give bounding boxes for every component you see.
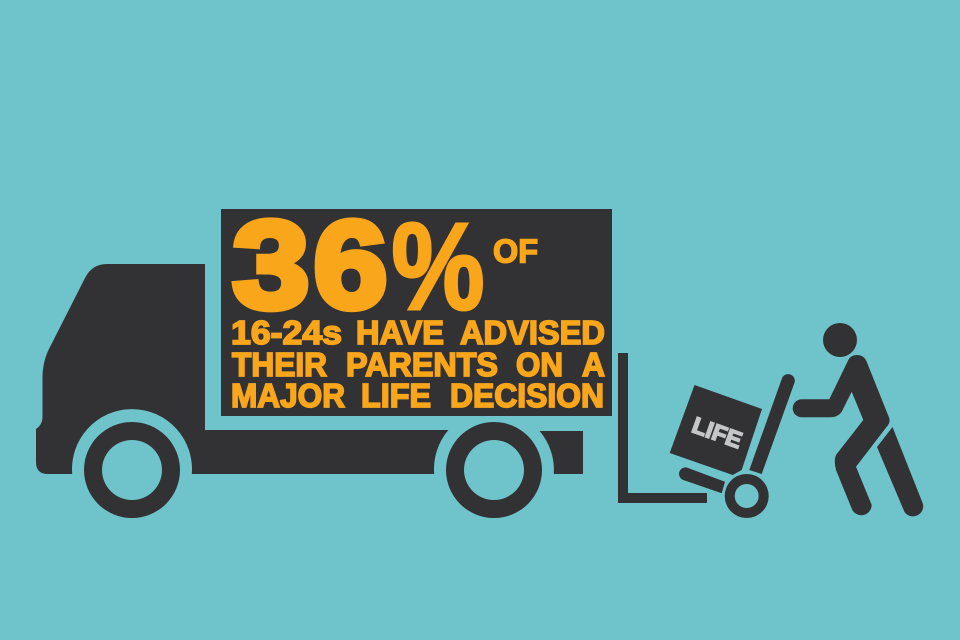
trolley foot plate [679, 467, 725, 493]
head [823, 323, 857, 357]
cargo panel [221, 209, 612, 416]
forklift fork [618, 353, 707, 503]
big digit 6: 6 [314, 196, 388, 334]
trolley wheel [725, 474, 769, 518]
box label LIFE: LIFE [689, 412, 746, 453]
statement line 3 [231, 377, 604, 414]
truck cab and chassis [36, 264, 448, 474]
word OF: OF [493, 232, 538, 270]
HAVE: HAVE [356, 314, 444, 351]
front wheel [84, 422, 180, 518]
truck [36, 264, 583, 518]
person pushing trolley [793, 323, 923, 516]
statement line 2 [232, 346, 605, 383]
A: A [582, 346, 605, 383]
chassis rear section [540, 431, 583, 474]
trolley handle [749, 374, 795, 474]
PARENTS: PARENTS [346, 346, 498, 383]
big digit 3: 3 [232, 196, 310, 334]
hand truck with box [670, 374, 795, 518]
percent sign: % [392, 199, 484, 336]
box [670, 385, 762, 475]
16-24s: 16-24s [231, 314, 342, 351]
truck cargo panel with statistic [221, 196, 612, 416]
statement line 1 [231, 314, 605, 351]
rear wheel [446, 422, 542, 518]
DECISION: DECISION [450, 377, 604, 414]
MAJOR: MAJOR [231, 377, 345, 414]
ON: ON [516, 346, 563, 383]
LIFE: LIFE [361, 377, 431, 414]
back leg [877, 427, 923, 516]
body, arm and front leg [793, 355, 890, 515]
ADVISED: ADVISED [460, 314, 605, 351]
THEIR: THEIR [232, 346, 327, 383]
